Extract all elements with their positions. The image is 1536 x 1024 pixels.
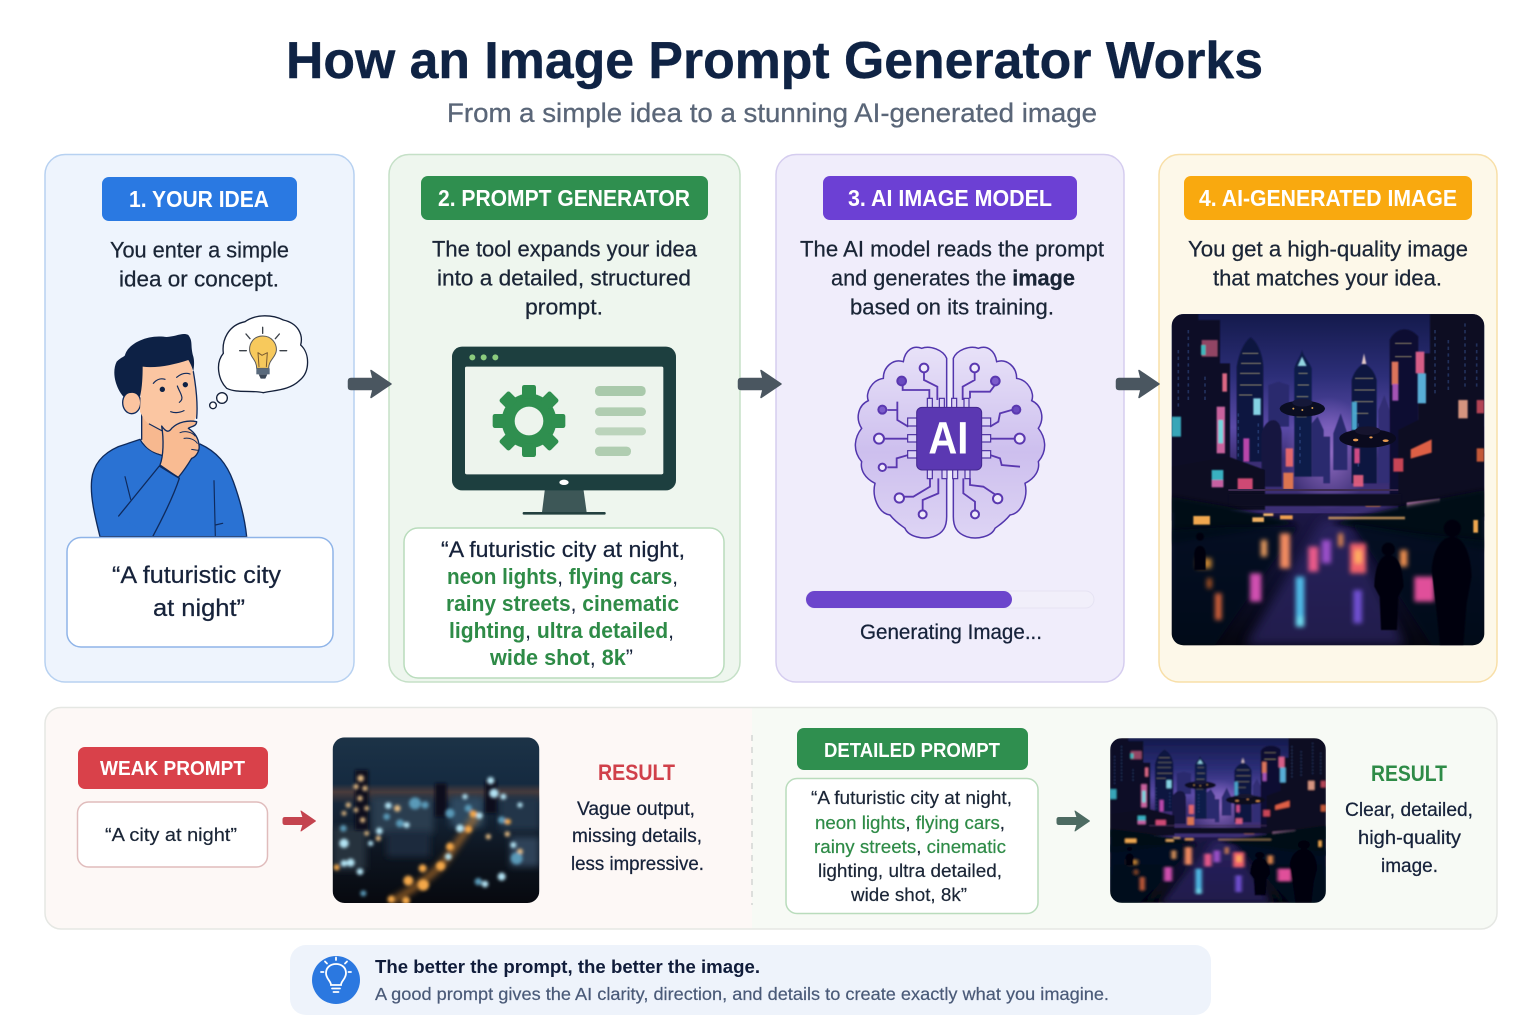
image: sharp neon city	[1110, 738, 1326, 903]
quote box: simple idea	[67, 538, 333, 647]
panel: 2. prompt generator	[389, 154, 740, 682]
weak result text	[571, 760, 704, 875]
quote box: detailed prompt: rainy streets, cinematic	[814, 836, 1006, 857]
quote box: detailed prompt	[786, 778, 1038, 914]
description: prompt generator: The tool expands your idea	[432, 236, 698, 262]
detailed result text: high-quality	[1358, 827, 1461, 849]
quote box: detailed prompt: “A futuristic city at night,	[811, 787, 1012, 808]
detailed result text: Clear, detailed,	[1345, 799, 1473, 821]
quote box: detailed prompt: neon lights, flying cars,	[815, 812, 1005, 833]
description: prompt generator	[432, 236, 698, 320]
description: AI image model: and generates the image	[831, 266, 1075, 290]
arrow: step 2 to 3	[738, 370, 781, 398]
badge: AI image model: 3. AI IMAGE MODEL	[848, 185, 1052, 211]
label: AI: AI	[928, 412, 968, 463]
weak result text: RESULT	[598, 760, 675, 785]
badge: detailed prompt	[797, 728, 1028, 770]
quote box: detailed prompt: wide shot, 8k”	[489, 645, 633, 670]
weak result text: missing details,	[572, 825, 702, 847]
quote box: weak prompt: “A city at night”	[105, 824, 237, 845]
quote box: detailed prompt: rainy streets, cinematic	[446, 591, 679, 616]
badge: your idea: 1. YOUR IDEA	[129, 186, 269, 212]
image: blurry city at night	[333, 737, 539, 905]
progress bar	[806, 591, 1094, 608]
tip heading: The better the prompt, the better the image.	[375, 957, 760, 977]
quote box: detailed prompt: neon lights, flying cars,	[447, 564, 678, 589]
badge: prompt generator	[421, 176, 708, 220]
icon: tip light bulb	[312, 956, 360, 1004]
panel: 3. AI image model	[776, 154, 1124, 682]
arrow: detailed prompt to result	[1057, 811, 1090, 831]
description: AI image model	[800, 236, 1104, 320]
badge: AI-generated image	[1184, 176, 1472, 220]
quote box: detailed prompt: “A futuristic city at night,	[441, 537, 685, 562]
quote box: weak prompt	[78, 802, 268, 867]
description: prompt generator: prompt.	[525, 294, 603, 320]
description: your idea: idea or concept.	[119, 266, 279, 292]
quote box: detailed prompt: lighting, ultra detailed,	[449, 618, 674, 643]
image: futuristic neon city at night	[1172, 314, 1484, 645]
panel: prompt comparison	[45, 708, 1497, 929]
description: your idea	[110, 238, 289, 292]
quote box: detailed prompt	[404, 528, 724, 678]
arrow: step 1 to 2	[348, 370, 391, 398]
quote box: detailed prompt: wide shot, 8k”	[850, 884, 967, 905]
description: AI image model: The AI model reads the prompt	[800, 236, 1104, 262]
description: AI-generated image: You get a high-quality image	[1188, 236, 1468, 262]
description: AI image model: based on its training.	[850, 294, 1054, 320]
weak result text: less impressive.	[571, 853, 704, 875]
quote box: detailed prompt: lighting, ultra detailed,	[818, 860, 1002, 881]
description: AI-generated image	[1188, 236, 1468, 290]
icon: thinking person with light bulb	[91, 316, 308, 537]
title: How an Image Prompt Generator Works	[286, 32, 1263, 90]
quote box: simple idea: “A futuristic city	[112, 562, 281, 589]
badge: weak prompt: WEAK PROMPT	[100, 758, 245, 780]
arrow: step 3 to 4	[1116, 370, 1159, 398]
badge: weak prompt	[78, 747, 268, 789]
detailed result text	[1345, 761, 1473, 877]
badge: AI-generated image: 4. AI-GENERATED IMAGE	[1199, 185, 1457, 211]
badge: prompt generator: 2. PROMPT GENERATOR	[438, 185, 690, 211]
callout: tip	[290, 945, 1211, 1015]
badge: your idea	[102, 177, 297, 221]
description: prompt generator: into a detailed, structured	[437, 266, 691, 290]
tip body: A good prompt gives the AI clarity, direction, and details to create exactly what you imagine.	[375, 984, 1109, 1004]
subtitle: From a simple idea to a stunning AI-generated image	[447, 98, 1097, 128]
description: your idea: You enter a simple	[110, 238, 289, 262]
progress label: Generating Image...	[860, 621, 1042, 644]
weak result text: Vague output,	[577, 798, 695, 820]
icon: monitor with gear	[452, 347, 676, 515]
arrow: weak prompt to result	[283, 811, 316, 831]
quote box: simple idea: at night”	[153, 595, 245, 622]
icon: AI brain chip	[855, 347, 1045, 538]
panel: 4. AI-generated image	[1159, 154, 1497, 682]
description: AI-generated image: that matches your idea.	[1213, 266, 1442, 290]
detailed result text: image.	[1381, 855, 1438, 877]
badge: AI image model	[823, 176, 1077, 220]
detailed result text: RESULT	[1371, 761, 1447, 786]
panel: 1. your idea	[45, 154, 354, 682]
badge: detailed prompt: DETAILED PROMPT	[824, 740, 1000, 762]
